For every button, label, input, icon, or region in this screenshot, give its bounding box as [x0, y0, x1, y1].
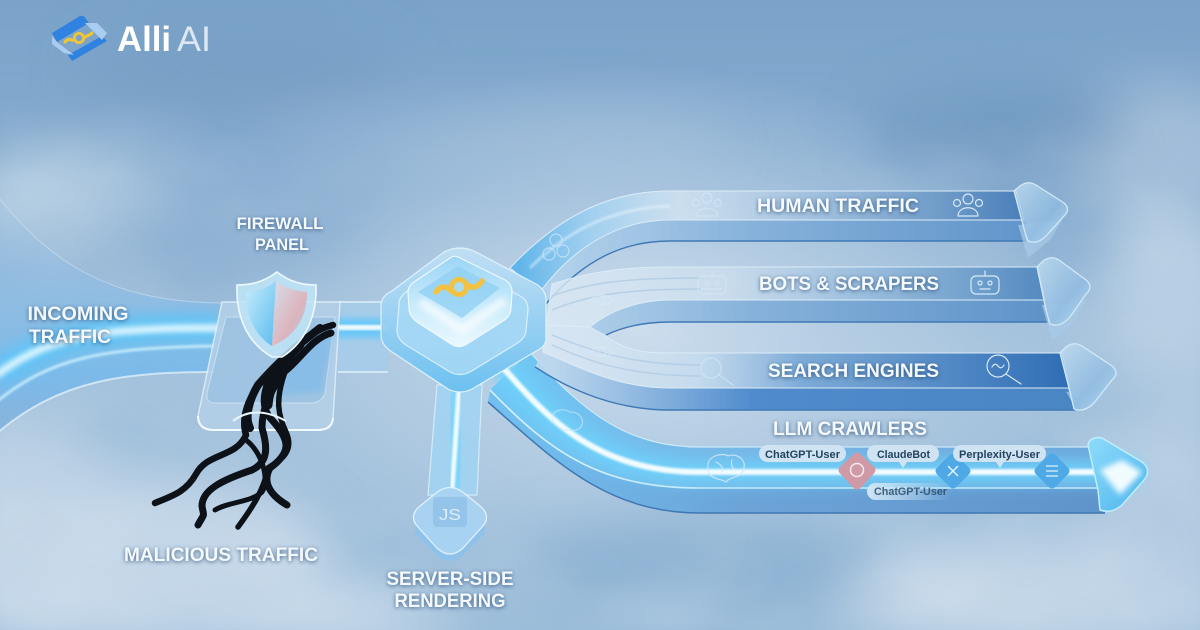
icon: logo hexagon: [52, 16, 107, 61]
firewall panel tray: [198, 302, 340, 430]
js diamond: [413, 488, 487, 561]
icon: magnifier left: [701, 358, 733, 385]
arrow: search engines: [1060, 344, 1116, 412]
label: server-side rendering: RENDERING: [394, 591, 506, 612]
llm crawlers channel: [470, 330, 1140, 513]
icon: robot right: [971, 271, 999, 294]
pill: perplexity-user: [953, 445, 1046, 468]
label: llm crawlers: LLM CRAWLERS: [773, 419, 927, 440]
icon: eye lower: [590, 347, 614, 357]
crawler name pills: [759, 445, 1046, 500]
label: malicious traffic: MALICIOUS TRAFFIC: [124, 545, 318, 566]
label: server-side rendering: SERVER-SIDE: [386, 569, 514, 590]
central hub: [381, 248, 546, 392]
pill: chatgpt-user lower: ChatGPT-User: [874, 486, 948, 498]
incoming traffic pipe: [0, 193, 222, 435]
server-side rendering pipe: [428, 385, 482, 495]
label: bots and scrapers: BOTS & SCRAPERS: [759, 274, 939, 295]
arrow: human traffic: [1014, 183, 1068, 258]
label: firewall panel: FIREWALL: [236, 214, 324, 233]
icon: robot left: [698, 271, 726, 294]
connector pipe: firewall to hub: [335, 302, 390, 372]
wordmark: Alli: [117, 20, 171, 59]
label: firewall panel: PANEL: [255, 235, 309, 254]
pill: perplexity-user: Perplexity-User: [959, 449, 1041, 461]
human traffic channel: [510, 191, 1026, 305]
icon: brain llm: [708, 454, 744, 482]
pill: claudebot: [867, 445, 939, 468]
pill: chatgpt-user: ChatGPT-User: [765, 449, 841, 461]
search engines channel: [535, 325, 1075, 410]
firewall shield: [237, 272, 316, 357]
icon: gears: [543, 234, 569, 260]
firewall tray front strap: [233, 412, 286, 421]
malicious traffic tendrils: [155, 325, 333, 527]
icon: brain on lower channel: [552, 410, 582, 431]
channel icons: [543, 193, 1021, 482]
hub top tier: [408, 256, 512, 346]
brand logo: [52, 16, 211, 61]
label: incoming traffic: TRAFFIC: [29, 327, 111, 348]
icon: people right: [954, 194, 982, 216]
node: perplexity: [1039, 458, 1065, 484]
wordmark: AI: [177, 20, 211, 59]
right arrow heads: [1014, 183, 1148, 511]
icon: people left: [692, 193, 722, 216]
arrow: llm crawlers: [1088, 438, 1148, 511]
label: incoming traffic: INCOMING: [28, 304, 128, 325]
hub base hexagon: [381, 248, 546, 392]
bots and scrapers channel: [546, 267, 1048, 335]
node: openai: [843, 457, 871, 485]
icon: magnifier right: [987, 355, 1021, 384]
hub middle tier: [397, 260, 528, 374]
icon: hub eye logo: [436, 280, 482, 294]
js diamond: JS: [439, 507, 461, 524]
pill: chatgpt-user: [759, 445, 846, 462]
pill: chatgpt-user lower: [867, 483, 955, 500]
arrow: bots and scrapers: [1037, 258, 1090, 340]
label: search engines: SEARCH ENGINES: [768, 361, 939, 382]
node: claudebot: [940, 458, 966, 484]
label: human traffic: HUMAN TRAFFIC: [757, 196, 919, 217]
icon: eye upper: [590, 295, 614, 305]
pill: claudebot: ClaudeBot: [877, 449, 930, 461]
llm crawler nodes: [843, 457, 1065, 485]
